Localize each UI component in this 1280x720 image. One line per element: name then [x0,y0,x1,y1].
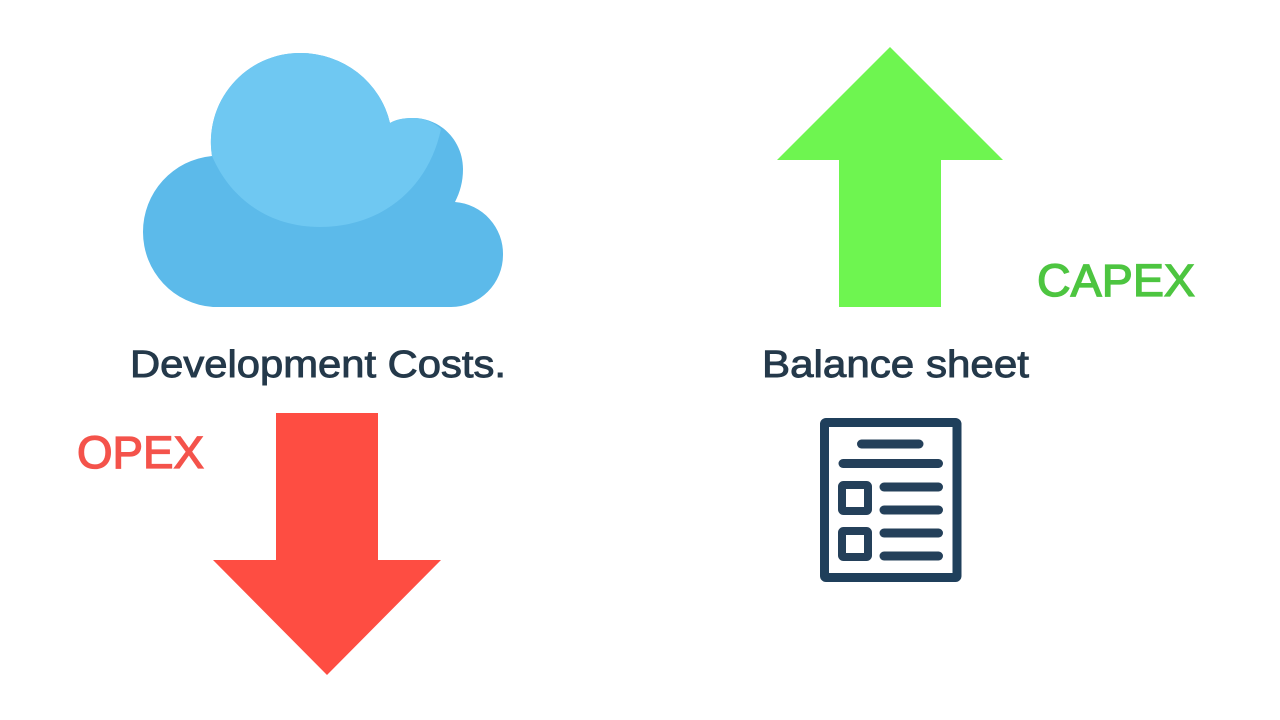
icon: cloud [143,53,503,307]
heading: Balance sheet: Balance sheet [762,344,1029,386]
icon: balance sheet document [824,422,957,578]
arrow: OPEX down [213,413,441,675]
heading: Development Costs.: Development Costs. [130,344,506,386]
arrow: CAPEX up [777,47,1003,307]
label: OPEX: OPEX [77,427,204,478]
label: CAPEX: CAPEX [1037,255,1195,306]
